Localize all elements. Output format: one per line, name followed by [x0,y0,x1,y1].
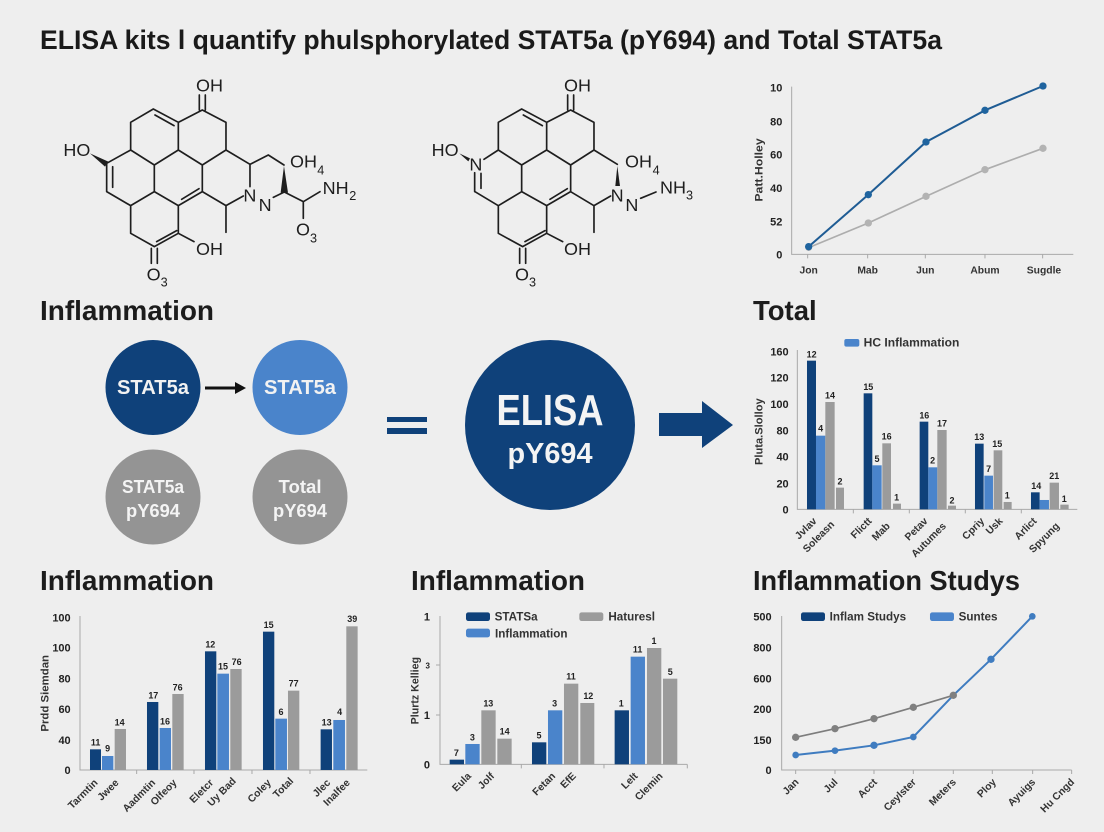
heading: inflammation lower middle: Inflammation [411,565,585,596]
molecule: left structure: O [296,220,310,240]
bar chart: lower left: 11 [91,737,100,747]
line chart: top right: Mab [857,265,878,276]
bar chart: total: 2 [930,456,935,466]
legend: lower middle: Haturesl [608,611,655,624]
bar chart: total: 20 [776,478,789,490]
molecule: right structure: N [611,186,624,206]
bar chart: lower middle: 7 [454,748,459,758]
bar chart: lower left: 76 [173,682,183,692]
bar chart: total: 14 [825,390,835,400]
bar chart: lower middle: 13 [483,698,493,708]
line chart: inflammation studys: 800 [753,642,772,654]
circle: STAT5a blue: STAT5a [264,376,337,399]
equals sign [387,417,427,434]
line chart: inflammation studys: 0 [766,765,772,777]
line chart: top right: Patt.Holley [754,138,766,202]
line chart: inflammation studys: Ploy [976,777,999,800]
bar chart: lower left: Inalfee [322,777,353,809]
line chart: inflammation studys [753,611,1077,815]
circle: Total pY694: pY694 [273,500,328,521]
line chart: inflammation studys: Ayuigs [1006,777,1038,809]
bar chart: lower left: Prdd Siemdan [40,655,52,732]
bar chart: total: 12 [807,349,817,359]
line chart: inflammation studys: Meters [927,777,959,808]
bar chart: total: Soleasn [801,519,837,555]
bar chart: total: 4 [818,423,823,433]
bar chart: lower middle: 1 [619,698,624,708]
line chart: top right: 80 [770,116,782,128]
circle: STAT5a pY694: STAT5a [122,476,185,497]
bar chart: lower left: 80 [58,673,71,685]
line chart: inflammation studys: 600 [753,673,772,685]
molecule: left structure: HO [63,140,90,160]
bar chart: lower middle: 3 [426,661,431,670]
line chart: top right: Jon [799,265,818,276]
molecule: left structure: O [147,265,161,285]
legend: lower middle: Inflammation [495,627,568,640]
bar chart: lower middle: 14 [500,727,510,737]
bar chart: total: Flictt [849,516,875,541]
molecule: right structure: NH [660,177,686,197]
molecule: right structure: OH [625,151,652,171]
bar chart: lower left: 14 [115,718,125,728]
bar chart: lower middle: 3 [470,732,475,742]
line chart: top right: Jun [916,265,935,276]
bar chart: total: Usk [984,516,1006,537]
heading: inflammation: Inflammation [40,295,214,326]
line chart: inflammation studys: Hu Cngd [1039,777,1077,815]
circle: STAT5a pY694: pY694 [126,500,181,521]
bar chart: total: 17 [937,419,947,429]
bar chart: lower left: Olfeoy [149,777,180,808]
bar chart: total: 1 [1005,490,1010,500]
bar chart: total: 16 [919,411,929,421]
bar chart: total: 40 [776,452,789,464]
bar chart: total: 13 [974,432,984,442]
bar chart: lower middle: Lelt [620,771,641,792]
bar chart: total: Spyung [1028,521,1062,556]
bar chart: total: Petav [903,516,931,543]
arrow: STAT5a to STAT5a [205,382,246,394]
bar chart: lower middle: 5 [668,667,673,677]
molecule: left structure: 3 [161,276,168,290]
bar chart: lower middle: EfE [559,771,579,791]
circle: STAT5a blue [252,340,348,435]
bar chart: lower middle: 11 [633,645,642,655]
molecule: left structure: NH [323,178,349,198]
molecule: left structure: OH [290,151,317,171]
bar chart: total: 5 [874,454,879,464]
bar chart: total: Arlict [1013,516,1040,542]
bar chart: lower middle: 0 [424,759,430,771]
line chart: top right: 0 [776,249,782,261]
bar chart: lower middle: 1 [424,710,430,722]
bar chart: total: Jvlav [793,516,820,542]
bar chart: lower left: Coley [246,777,274,805]
molecule: left structure: OH [196,239,223,259]
bar chart: lower middle: Clemin [633,771,665,803]
bar chart: lower left: Jlec [311,777,333,800]
circle: Total pY694: Total [278,476,322,497]
line chart: inflammation studys: Jul [822,777,841,795]
line chart: top right: Sugdle [1027,265,1061,276]
molecule: left structure: 2 [349,189,356,203]
bar chart: total: Mab [870,521,893,543]
bar chart: total: 14 [1031,481,1041,491]
legend: inflam studys and suntes: Inflam Studys [830,611,906,624]
bar chart: lower left: 13 [322,718,332,728]
circle: ELISA pY694: pY694 [508,438,592,470]
line chart: top right: 60 [770,150,782,162]
bar chart: total: 7 [986,464,991,474]
line chart: inflammation studys: 200 [753,704,772,716]
line chart: inflammation studys: 500 [753,612,772,624]
bar chart: total: Pluta.Slolloy [754,398,766,465]
bar chart: total: 1 [1062,494,1067,504]
bar chart: lower middle: 12 [583,691,593,701]
bar chart: lower middle [410,611,687,803]
circle: STAT5a pY694 [106,450,200,544]
bar chart: lower left: 60 [58,704,71,716]
bar chart: total: 160 [770,346,789,358]
title: ELISA kits l quantify phulsphorylated STAT5a (pY694) and Total STAT5a [40,25,943,55]
line chart: top right: Abum [970,265,1000,276]
bar chart: total: 2 [837,476,842,486]
legend: HC Inflammation: HC Inflammation [864,337,959,350]
bar chart: total: 0 [783,504,789,516]
line chart: top right: 52 [770,216,782,228]
molecule: right structure: 4 [653,164,660,178]
bar chart: lower middle: 1 [424,612,430,624]
bar chart: lower left: Eletcr [188,778,216,806]
line chart: inflammation studys: 150 [753,735,772,747]
bar chart: lower middle: 11 [566,672,576,682]
circle: STAT5a dark: STAT5a [117,376,190,399]
bar chart: lower left: 0 [65,765,71,777]
bar chart: lower middle: Fetan [531,771,558,798]
bar chart: lower left: 6 [278,707,283,717]
legend: lower middle [466,611,655,640]
line chart: top right: 10 [770,83,782,95]
bar chart: lower left: Tarmtin [66,778,100,812]
bar chart: lower left: 9 [105,744,110,754]
bar chart: lower left: 100 [52,612,71,624]
bar chart: lower left: 77 [289,678,299,688]
molecule: right structure: N [625,195,638,215]
bar chart: lower left: 4 [337,707,342,717]
bar chart: lower left: Uy Bad [206,776,239,809]
bar chart: lower left: 15 [264,620,274,630]
bar chart: lower left: 17 [148,690,158,700]
legend: inflam studys and suntes: Suntes [959,611,998,624]
molecule: left structure: OH [196,75,223,95]
bar chart: lower left: Aadmtin [121,778,158,815]
bar chart: total: Autumes [910,521,949,560]
molecule: left structure: N [259,195,272,215]
bar chart: lower left: 12 [205,640,215,650]
line chart: inflammation studys: Jan [781,777,801,797]
bar chart: total: 21 [1049,471,1059,481]
bar chart: total: Cpriy [961,516,987,542]
bar chart: lower left: 15 [218,661,228,671]
bar chart: total: 2 [949,495,954,505]
circle: ELISA pY694 [465,340,635,510]
bar chart: total: 16 [882,432,892,442]
bar chart: lower left: 16 [160,716,170,726]
bar chart: total: 80 [776,425,789,437]
circle: STAT5a dark [106,340,200,435]
line chart: top right [754,82,1073,276]
bar chart: lower left: 40 [58,735,71,747]
arrow: to total chart [659,401,733,448]
molecule: left structure: 4 [317,164,324,178]
legend: lower middle: STATSa [495,611,538,624]
molecule: right structure: OH [564,239,591,259]
circle: ELISA pY694: ELISA [496,386,604,435]
molecule: right structure [432,75,693,290]
line chart: inflammation studys: Ceylster [882,777,919,814]
bar chart: total: 1 [894,492,899,502]
molecule: left structure: N [243,186,256,206]
bar chart: lower middle: 5 [536,731,541,741]
molecule: left structure: 3 [310,232,317,246]
bar chart: lower middle: Eula [451,771,474,794]
bar chart: lower left: Jwee [96,777,122,803]
molecule: right structure: 3 [686,188,693,202]
bar chart: lower left [40,612,367,815]
bar chart: lower middle: Jolf [476,771,497,792]
bar chart: total: 15 [863,382,873,392]
bar chart: lower left: 76 [232,657,242,667]
heading: inflammation studys: Inflammation Studys [753,565,1020,596]
bar chart: lower left: 39 [347,614,357,624]
bar chart: total: 100 [770,399,789,411]
bar chart: lower left: Total [271,776,296,801]
circle: Total pY694 [252,450,348,544]
legend: inflam studys and suntes [801,611,998,624]
bar chart: lower left: 100 [52,643,71,655]
bar chart: lower middle: 3 [552,698,557,708]
heading: inflammation lower left: Inflammation [40,565,214,596]
bar chart: total: 120 [770,373,789,385]
line chart: inflammation studys: Acct [856,777,880,801]
bar chart: lower middle: Plurtz Kellieg [410,657,422,724]
molecule: right structure: 3 [529,276,536,290]
line chart: top right: 40 [770,183,782,195]
molecule: right structure: OH [564,75,591,95]
heading: total: Total [753,295,817,326]
molecule: right structure: HO [432,140,459,160]
molecule: right structure: O [515,265,529,285]
molecule: left structure [63,75,356,290]
molecule: right structure: N [469,155,482,175]
bar chart: total: 15 [992,439,1002,449]
bar chart: lower middle: 1 [651,636,656,646]
bar chart: total [754,337,1077,560]
